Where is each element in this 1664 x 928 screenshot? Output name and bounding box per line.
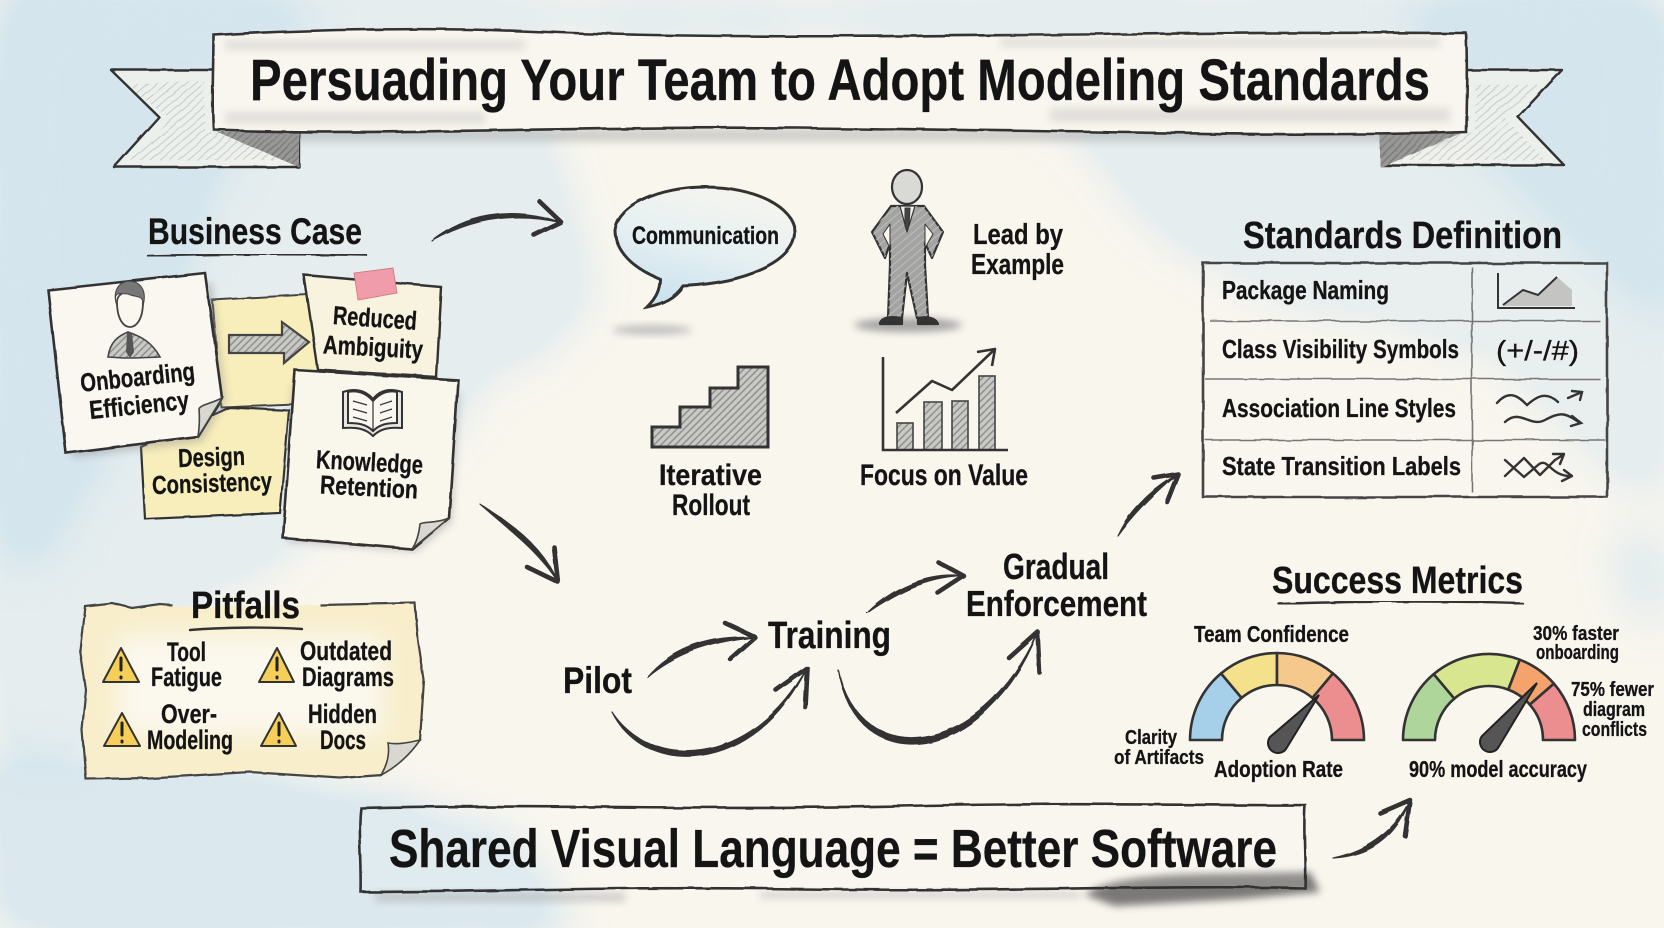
focus on value — [860, 349, 1028, 492]
smudge — [1085, 872, 1320, 906]
metric labels: diagram — [1583, 699, 1645, 721]
text: lead by example: Example — [971, 249, 1064, 281]
text: iterative rollout: Rollout — [672, 489, 750, 522]
flow labels: Enforcement — [966, 583, 1147, 624]
note: reduced ambiguity — [304, 268, 441, 377]
heading: success metrics: Success Metrics — [1272, 560, 1523, 602]
flow labels: Training — [768, 615, 891, 657]
banner shading — [225, 38, 1450, 124]
flow: pilot to enforcement — [563, 474, 1178, 757]
icon: grey arrow — [229, 322, 309, 363]
paper centre — [118, 635, 383, 735]
needle — [1480, 683, 1537, 752]
communication bubble — [612, 187, 795, 335]
text: reduced ambiguity — [322, 300, 424, 365]
panel: pitfalls — [80, 585, 424, 779]
metric labels: Clarity — [1125, 727, 1178, 749]
iterative rollout — [652, 367, 768, 522]
page fold — [381, 740, 420, 775]
text: onboarding efficiency: Efficiency — [88, 385, 191, 425]
pitfall labels: Hidden — [308, 699, 377, 729]
pitfall labels: Outdated — [300, 636, 392, 666]
pitfall labels: Modeling — [147, 725, 233, 755]
metric labels: Team Confidence — [1194, 621, 1349, 647]
bottom banner — [360, 804, 1320, 906]
text: iterative rollout — [659, 459, 762, 522]
panel: success metrics — [1114, 560, 1654, 782]
text: design consistency: Consistency — [152, 466, 273, 500]
text: onboarding efficiency — [79, 356, 196, 425]
heading underline — [190, 628, 302, 630]
banner box — [360, 804, 1305, 892]
tape — [354, 268, 397, 300]
banner shadow — [375, 892, 1080, 902]
flow labels: Pilot — [563, 660, 632, 701]
pitfall labels — [147, 636, 394, 755]
text: knowledge retention: Retention — [319, 469, 419, 505]
ground shadow — [854, 318, 962, 332]
text: reduced ambiguity: Ambiguity — [322, 329, 424, 365]
text: onboarding efficiency: Onboarding — [79, 356, 196, 398]
pitfall labels: Fatigue — [151, 662, 222, 692]
bubble shadow — [612, 325, 692, 335]
text: knowledge retention — [315, 444, 424, 505]
gauge: team confidence — [1190, 653, 1364, 753]
pitfall labels: Diagrams — [302, 662, 394, 692]
metric labels: 90% model accuracy — [1409, 756, 1587, 782]
ribbon tail: right — [1380, 68, 1564, 167]
bar chart icon — [883, 349, 1008, 450]
takeaway text: Shared Visual Language = Better Software — [389, 819, 1277, 879]
gauge: accuracy — [1403, 654, 1575, 752]
icon: person — [108, 281, 160, 358]
needle — [1268, 695, 1319, 753]
note: knowledge retention — [283, 370, 460, 552]
text: reduced ambiguity: Reduced — [332, 300, 418, 336]
torn paper outline — [80, 603, 424, 779]
ribbon tail: left — [111, 70, 299, 167]
icon: book — [343, 390, 402, 436]
title banner — [111, 29, 1564, 167]
icon: line chart — [1498, 273, 1575, 308]
text: iterative rollout: Iterative — [659, 459, 762, 492]
text: lead by example — [971, 219, 1064, 281]
text: communication: Communication — [632, 222, 779, 250]
flow labels: Gradual — [1003, 546, 1109, 587]
row text: State Transition Labels — [1222, 451, 1461, 481]
icons: warning triangles — [103, 648, 296, 746]
flow arrows — [612, 474, 1178, 757]
metric labels: 30% faster — [1533, 623, 1619, 645]
row text: Package Naming — [1222, 275, 1389, 305]
note: design consistency — [141, 407, 289, 519]
heading: standards definition: Standards Definition — [1243, 215, 1562, 257]
pitfall labels: Tool — [167, 637, 206, 667]
speech bubble — [615, 187, 795, 307]
panel: standards definition — [1203, 215, 1607, 497]
metric labels: Adoption Rate — [1214, 756, 1343, 782]
torn paper fill — [80, 603, 424, 779]
text: design consistency: Design — [177, 441, 246, 473]
heading: pitfalls: Pitfalls — [191, 585, 300, 627]
row text — [1222, 275, 1461, 481]
panel: business case — [48, 211, 460, 552]
symbols text: (+/-/#) — [1496, 335, 1579, 366]
heading underline — [1279, 602, 1522, 604]
flow labels — [563, 546, 1147, 701]
note: onboarding efficiency — [48, 273, 226, 458]
arrow: business case to communication — [432, 201, 561, 241]
arrow: takeaway to metrics — [1333, 800, 1410, 858]
row text: Class Visibility Symbols — [1222, 334, 1459, 364]
metric labels: of Artifacts — [1114, 747, 1204, 769]
heading: business case: Business Case — [148, 211, 362, 252]
text: knowledge retention: Knowledge — [315, 444, 424, 480]
row text: Association Line Styles — [1222, 393, 1456, 423]
text: lead by example: Lead by — [973, 219, 1063, 251]
heading underline — [148, 254, 366, 256]
arrow: business case to pilot — [481, 505, 558, 582]
icon: stairs — [652, 367, 768, 447]
banner shadow — [240, 128, 1450, 142]
text: design consistency — [152, 441, 273, 500]
icon: crossing arrows — [1505, 454, 1572, 481]
note: yellow arrow — [212, 294, 320, 407]
metric labels: onboarding — [1536, 642, 1619, 664]
title text: Persuading Your Team to Adopt Modeling Standards — [250, 48, 1430, 113]
pitfall labels: Over- — [161, 699, 217, 729]
text: focus on value: Focus on Value — [860, 459, 1028, 492]
banner body — [213, 29, 1467, 134]
lead by example — [854, 170, 1064, 332]
metric labels: conflicts — [1582, 719, 1647, 741]
icon: wavy lines — [1497, 391, 1582, 426]
pitfall labels: Docs — [320, 725, 366, 755]
figure — [872, 170, 943, 324]
warning marks — [121, 658, 279, 742]
table — [1203, 263, 1607, 497]
metric labels — [1114, 621, 1654, 782]
